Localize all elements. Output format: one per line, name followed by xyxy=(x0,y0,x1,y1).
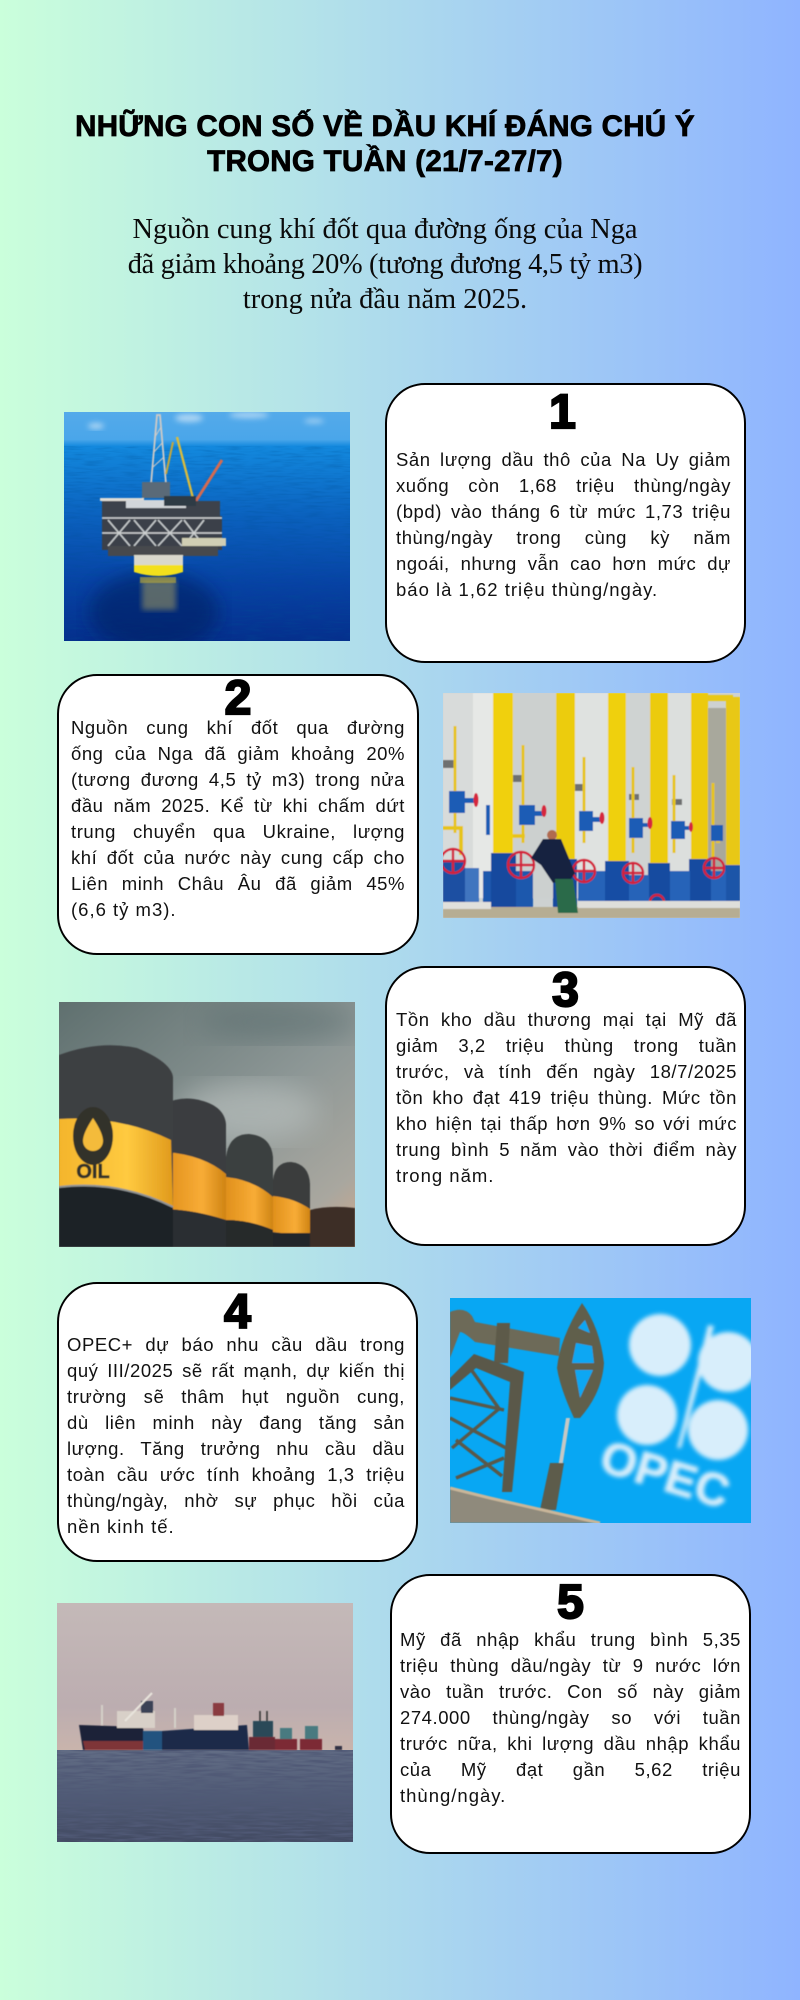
text block 2: đầu năm 2025. Kể từ khi chấm dứt xyxy=(71,795,405,816)
text block 5: triệu thùng dầu/ngày từ 9 nước lớn xyxy=(400,1655,741,1676)
number 4: 4 xyxy=(224,1286,251,1339)
subtitle: trong nửa đầu năm 2025. xyxy=(243,284,527,315)
text block 4: thùng/ngày, nhờ sự phục hồi của xyxy=(67,1490,405,1511)
text block 3: trước, và tính đến ngày 18/7/2025 xyxy=(396,1061,737,1082)
photo: gas pipeline valves and worker xyxy=(443,693,740,918)
photo: oil barrels xyxy=(59,1002,355,1247)
text block 5: vào tuần trước. Con số này giảm xyxy=(400,1681,741,1702)
number 2: 2 xyxy=(225,672,251,725)
text block 3: kho hiện tại thấp hơn 9% so với mức xyxy=(396,1113,737,1134)
number 3: 3 xyxy=(552,964,579,1017)
number 1: 1 xyxy=(549,386,576,439)
text block 2: (tương đương 4,5 tỷ m3) trong nửa xyxy=(71,769,405,790)
text block 4: trường sẽ thâm hụt nguồn cung, xyxy=(67,1386,405,1407)
text block 1: Sản lượng dầu thô của Na Uy giảm xyxy=(396,449,731,470)
text block 3: Tồn kho dầu thương mại tại Mỹ đã xyxy=(396,1009,737,1030)
text block 4: OPEC+ dự báo nhu cầu dầu trong xyxy=(67,1334,405,1355)
card 4 xyxy=(57,1282,418,1562)
title: TRONG TUẦN (21/7-27/7) xyxy=(207,145,563,178)
text block 4: nền kinh tế. xyxy=(67,1516,175,1537)
text block 1: ngoái, nhưng vẫn cao hơn mức dự xyxy=(396,553,731,574)
text block 1: thùng/ngày trong cùng kỳ năm xyxy=(396,527,731,548)
photo: pumpjack and OPEC logo xyxy=(450,1298,751,1523)
text block 2: khí đốt của nước này cung cấp cho xyxy=(71,847,405,868)
photo: oil tankers at sea xyxy=(57,1603,353,1842)
text block 1: (bpd) vào tháng 6 từ mức 1,73 triệu xyxy=(396,501,731,522)
subtitle: đã giảm khoảng 20% (tương đương 4,5 tỷ m3) xyxy=(128,249,642,280)
card 3 xyxy=(385,966,746,1246)
text block 5: 274.000 thùng/ngày so với tuần xyxy=(400,1707,741,1728)
text block 3: trong năm. xyxy=(396,1165,494,1186)
card 5 xyxy=(390,1574,751,1854)
text block 2 xyxy=(71,717,405,920)
text block 5: trước nữa, khi lượng dầu nhập khẩu xyxy=(400,1733,741,1754)
text block 3: tồn kho đạt 419 triệu thùng. Mức tồn xyxy=(396,1087,737,1108)
text block 3: giảm 3,2 triệu thùng trong tuần xyxy=(396,1035,737,1056)
card 2 xyxy=(57,674,419,955)
photo: oil barrels: OIL xyxy=(76,1161,110,1183)
text block 5 xyxy=(400,1629,741,1806)
text block 5: Mỹ đã nhập khẩu trung bình 5,35 xyxy=(400,1629,741,1650)
text block 4: toàn cầu ước tính khoảng 1,3 triệu xyxy=(67,1464,405,1485)
text block 3 xyxy=(396,1009,737,1186)
text block 2: Liên minh Châu Âu đã giảm 45% xyxy=(71,873,405,894)
text block 3: trung bình 5 năm vào thời điểm này xyxy=(396,1139,737,1160)
text block 2: Nguồn cung khí đốt qua đường xyxy=(71,717,405,738)
subtitle xyxy=(128,214,642,315)
text block 5: của Mỹ đạt gần 5,62 triệu xyxy=(400,1759,741,1780)
title xyxy=(75,109,695,178)
text block 2: (6,6 tỷ m3). xyxy=(71,899,177,920)
photo: pumpjack and OPEC logo: OPEC xyxy=(594,1430,736,1518)
text block 1: xuống còn 1,68 triệu thùng/ngày xyxy=(396,475,731,496)
text block 4: quý III/2025 sẽ rất mạnh, dự kiến thị xyxy=(67,1360,405,1381)
text block 4 xyxy=(67,1334,405,1537)
title: NHỮNG CON SỐ VỀ DẦU KHÍ ĐÁNG CHÚ Ý xyxy=(75,110,695,143)
number 5: 5 xyxy=(557,1576,584,1629)
text block 1 xyxy=(396,449,731,600)
photo: offshore oil platform xyxy=(64,412,350,641)
text block 2: ống của Nga đã giảm khoảng 20% xyxy=(71,743,405,764)
text block 5: thùng/ngày. xyxy=(400,1785,506,1806)
card 1 xyxy=(385,383,746,663)
subtitle: Nguồn cung khí đốt qua đường ống của Nga xyxy=(132,214,638,245)
text block 4: lượng. Tăng trưởng nhu cầu dầu xyxy=(67,1438,405,1459)
text block 2: trung chuyển qua Ukraine, lượng xyxy=(71,821,405,842)
text block 1: báo là 1,62 triệu thùng/ngày. xyxy=(396,579,658,600)
text block 4: dù liên minh này đang tăng sản xyxy=(67,1412,405,1433)
